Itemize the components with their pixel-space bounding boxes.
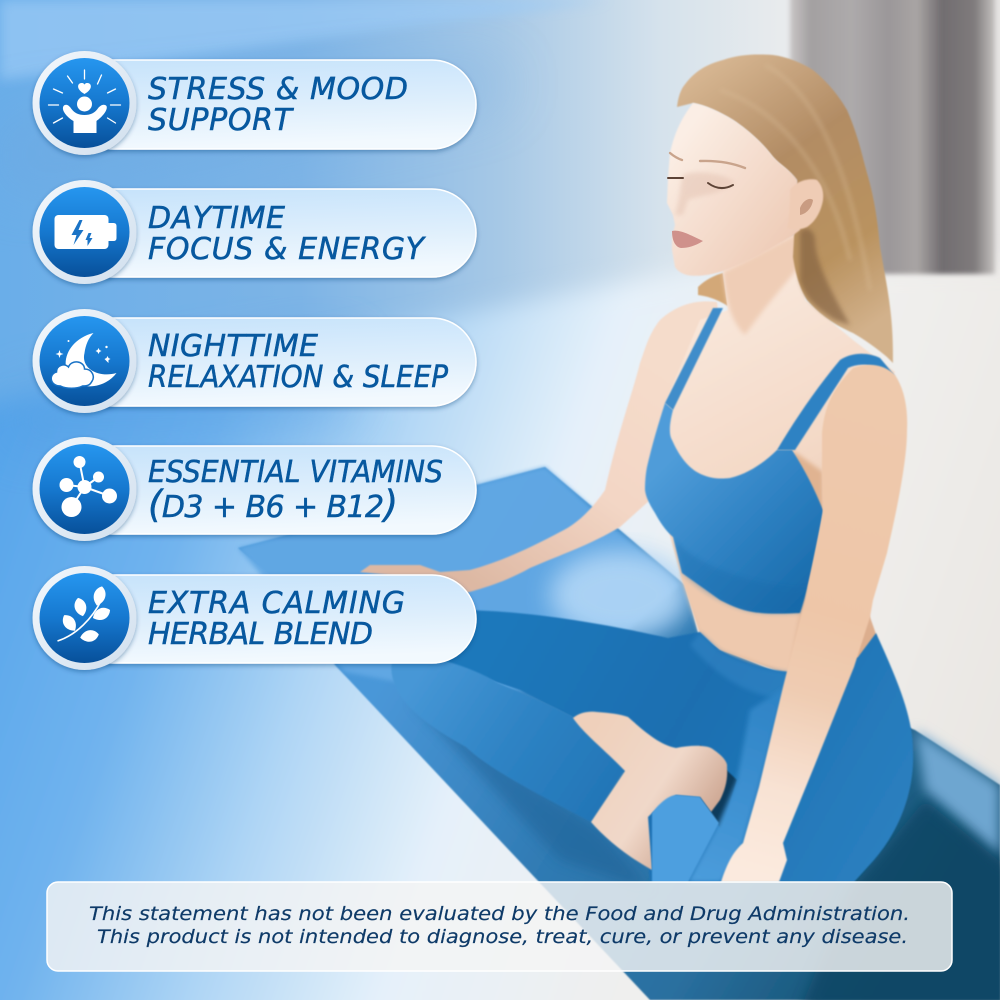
front shin [391,650,625,822]
benefit: daytime focus and energy: FOCUS & ENERGY [148,232,427,267]
benefit: nighttime relaxation and sleep: RELAXATION & SLEEP [148,360,449,395]
face [667,103,800,276]
label: nighttime relaxation: NIGHTTIME [148,329,318,364]
disclaimer panel: This product is not intended to diagnose, treat, cure, or prevent any disease. [97,926,908,948]
label: daytime focus: DAYTIME [148,201,285,236]
ear [787,179,823,229]
benefit: essential vitamins: (D3 + B6 + B12) [148,483,398,526]
sports top [645,403,823,614]
left arm [360,301,720,598]
disclaimer panel [47,882,952,971]
benefit: stress and mood support [32,51,476,155]
hair strand behind neck [698,273,728,306]
woman meditating [360,55,913,882]
bottom band of top [675,540,817,614]
label: vitamins: ESSENTIAL VITAMINS [148,455,443,490]
leggings main [430,610,913,882]
benefit: extra calming herbal blend: HERBAL BLEND [148,617,373,652]
neck shade [723,232,800,335]
disclaimer panel: This statement has not been evaluated by the Food and Drug Administration. [89,903,910,925]
hair shadow [800,229,850,325]
curtain [790,0,995,274]
icon: molecule [60,456,117,517]
near thigh [688,687,785,882]
icon: person with heart [48,70,120,133]
benefit: extra calming herbal blend [32,566,476,670]
foot and ankle [573,712,727,870]
benefit: stress and mood support: SUPPORT [148,103,295,138]
icon: moon and cloud [51,333,116,388]
hair highlights [720,65,870,290]
torso skin [655,232,895,675]
nose and eye shadow [675,172,735,215]
shadow gap [700,745,737,830]
straps [665,308,723,410]
belly shade [680,573,800,675]
label: calming blend: EXTRA CALMING [148,586,405,621]
label: stress and mood: STRESS & MOOD [148,72,408,107]
benefit: daytime focus and energy [32,180,476,284]
benefit: essential vitamins [32,437,476,541]
benefit: nighttime relaxation and sleep [32,309,476,413]
right arm [721,365,907,882]
icon: herb sprig [58,585,113,643]
near shin cuff [652,795,719,882]
hair [677,55,893,363]
yoga mat [238,467,1000,1000]
eyebrow, eyes and lips [668,153,745,188]
waistband shading [690,632,790,700]
icon: battery [54,215,116,249]
